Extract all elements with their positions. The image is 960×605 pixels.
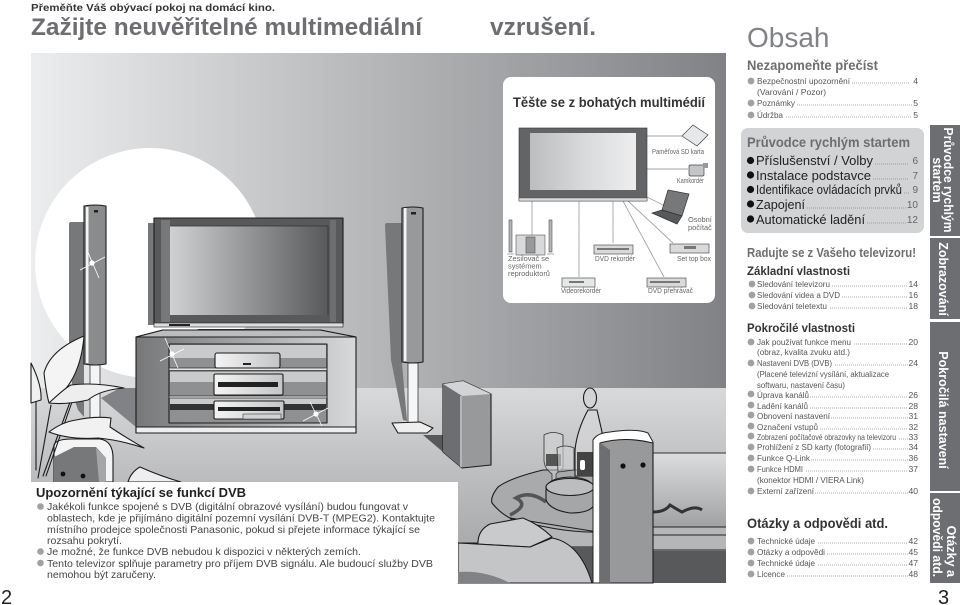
icon: speaker system: [507, 220, 554, 255]
section: advanced features: Nastavení DVB (DVB): [757, 358, 832, 368]
tab: quick start: [930, 125, 960, 236]
label: DVD player: DVD přehrávač: [648, 286, 693, 295]
section: advanced features: Obnovení nastavení: [757, 411, 831, 421]
section: must read: Nezapomeňte přečíst: [747, 58, 878, 73]
section: advanced features: Úprava kanálů: [757, 390, 809, 400]
TV stand with devices: [136, 330, 356, 433]
subwoofer: [443, 381, 491, 468]
panel: DVB notice: Jakékoli funkce spojené s DVB (digitální obrazové vysílání) budou fungovat v: [47, 502, 409, 513]
section: must read: [747, 58, 918, 120]
icon: set top box: [670, 244, 709, 253]
panel: quick start guide: 6: [912, 156, 918, 167]
section: advanced features: softwaru, nastavení času): [757, 380, 845, 390]
section: advanced features: 37: [908, 464, 918, 474]
section: advanced features: 20: [908, 337, 918, 347]
small TV: [519, 128, 647, 201]
section: advanced features: 34: [908, 442, 918, 452]
icon: laptop: [652, 190, 689, 224]
icon: camcorder: [689, 163, 708, 176]
panel: DVB notice: rozsahu pokrytí.: [47, 536, 122, 547]
section: basic features: Sledování televizoru: [757, 279, 830, 289]
left speaker: [69, 205, 106, 420]
title: [31, 14, 596, 41]
section: questions and answers: [747, 515, 918, 579]
section: advanced features: (Placené televizní vysílání, aktualizace: [757, 369, 889, 379]
subtitle: Přeměňte Váš obývací pokoj na domácí kino.: [31, 2, 275, 14]
illustration: living room with TV: [31, 53, 726, 583]
tab: advanced: Pokročilá nastavení: [936, 351, 950, 469]
section: advanced features: 26: [908, 390, 918, 400]
panel: quick start guide: 9: [912, 185, 918, 196]
panel: quick start guide: Automatické ladění: [756, 213, 866, 227]
section: must read: (Varování / Pozor): [757, 87, 826, 97]
section: questions and answers: Technické údaje: [757, 536, 815, 546]
label: VCR: Videorekordér: [561, 286, 601, 295]
section: advanced features: 32: [908, 422, 918, 432]
panel: quick start guide: 7: [912, 171, 918, 182]
section: must read: Bezpečnostní upozornění: [757, 76, 851, 86]
section: advanced features: (konektor HDMI / VIERA Link): [757, 475, 864, 485]
section: advanced features: Pokročilé vlastnosti: [747, 321, 855, 335]
label: speaker system: systémem: [508, 262, 542, 270]
section: advanced features: 31: [908, 411, 918, 421]
label: SD card: Paměťová SD karta: [652, 147, 705, 156]
section: questions and answers: 45: [908, 547, 918, 557]
section: must read: 5: [913, 98, 918, 108]
tab: questions: odpovědi atd.: [930, 498, 944, 577]
right speaker: [385, 207, 433, 433]
tab: viewing: Zobrazování: [936, 242, 950, 316]
label: set top box: Set top box: [677, 254, 711, 263]
section: advanced features: 28: [908, 401, 918, 411]
section: basic features: Základní vlastnosti: [747, 264, 850, 278]
title: Zažijte neuvěřitelné multimediální: [31, 14, 423, 41]
television: [148, 218, 343, 333]
section: advanced features: (obraz, kvalita zvuku atd.): [757, 347, 850, 357]
panel: quick start guide: Příslušenství / Volby: [756, 154, 874, 168]
section: advanced features: 36: [908, 453, 918, 463]
panel: quick start guide: 10: [907, 200, 918, 211]
section: advanced features: 33: [908, 432, 918, 442]
section: advanced features: 40: [908, 486, 918, 496]
panel: DVB notice: Tento televizor splňuje parametry pro příjem DVB signálu. Ale budoucí služby DVB: [47, 559, 433, 570]
panel: quick start guide: Průvodce rychlým startem: [747, 135, 910, 150]
label: speaker system: Zesilovač se: [508, 254, 549, 263]
section: questions and answers: Otázky a odpovědi atd.: [747, 515, 888, 531]
label: speaker system: reproduktorů: [508, 269, 550, 278]
panel: quick start guide: [741, 128, 924, 233]
section: advanced features: Funkce HDMI: [757, 464, 803, 474]
panel: DVB notice: Upozornění týkající se funkcí DVB: [36, 486, 246, 500]
section: advanced features: Zobrazení počítačové obrazovky na televizoru: [757, 432, 896, 442]
panel: quick start guide: 12: [907, 215, 918, 226]
panel: multimedia connections: [503, 77, 715, 303]
heading: Těšte se z bohatých multimédií: [513, 94, 706, 110]
section: questions and answers: Technické údaje: [757, 558, 815, 568]
section: questions and answers: Otázky a odpovědi: [757, 547, 825, 557]
section: basic features: 14: [908, 279, 918, 289]
tab: questions: [930, 493, 960, 583]
label: personal computer: počítač: [688, 223, 712, 232]
panel: DVB notice: Je možné, že funkce DVB nebudou k dispozici v některých zemích.: [47, 547, 361, 558]
panel: DVB notice: nemohou být zaručeny.: [47, 570, 156, 581]
tab: viewing: [930, 238, 960, 319]
section: basic features: 18: [908, 301, 918, 311]
section: advanced features: Externí zařízení: [757, 486, 815, 496]
icon: DVD player: [647, 278, 686, 287]
bottle and glasses: [544, 388, 602, 513]
section: advanced features: [747, 321, 918, 496]
panel: DVB notice: [31, 482, 458, 583]
section: advanced features: Jak používat funkce menu: [757, 337, 851, 347]
panel: quick start guide: Identifikace ovládacích prvků: [756, 183, 902, 197]
section: advanced features: Funkce Q-Link: [757, 453, 811, 463]
panel: quick start guide: Zapojení: [756, 198, 805, 212]
tab: quick start: startem: [930, 157, 944, 203]
section: basic features: Sledování teletextu: [757, 301, 827, 311]
section: basic features: [747, 264, 918, 311]
panel: DVB notice: místního prodejce společnosti Panasonic, pokud si přejete informace týkající se: [47, 525, 420, 536]
section: advanced features: Prohlížení z SD karty (fotografií): [757, 442, 871, 452]
icon: SD card: [682, 125, 708, 146]
section: basic features: 16: [908, 290, 918, 300]
label: personal computer: Osobní: [688, 215, 713, 224]
tab: quick start: Průvodce rychlým: [941, 128, 955, 232]
label: speaker system: [508, 254, 550, 278]
section: must read: Údržba: [757, 110, 783, 120]
label: personal computer: [688, 215, 713, 232]
tab: advanced: [930, 322, 960, 491]
section: must read: 5: [913, 110, 918, 120]
sofa back and table: [492, 453, 726, 583]
heading: enjoy your TV: Radujte se z Vašeho televizoru!: [747, 245, 916, 260]
label: camcorder: Kamkordér: [677, 176, 704, 185]
section: questions and answers: 47: [908, 558, 918, 568]
front right speaker: [593, 430, 653, 583]
icon: VCR: [562, 278, 595, 287]
plant and front left speaker: [31, 336, 181, 482]
tab: questions: Otázky a: [944, 526, 958, 578]
section: questions and answers: 48: [908, 569, 918, 579]
section: advanced features: Ladění kanálů: [757, 401, 808, 411]
icon: DVD recorder: [594, 245, 633, 254]
section: basic features: Sledování videa a DVD: [757, 290, 840, 300]
label: DVD recorder: DVD rekordér: [595, 254, 635, 263]
section: questions and answers: Licence: [757, 569, 785, 579]
section: must read: Poznámky: [757, 98, 796, 108]
sparkles: [80, 250, 328, 426]
cushions: [458, 518, 592, 583]
section: must read: 4: [913, 76, 918, 86]
section: questions and answers: 42: [908, 536, 918, 546]
section: advanced features: Označení vstupů: [757, 422, 818, 432]
heading: contents: Obsah: [747, 22, 830, 53]
panel: quick start guide: Instalace podstavce: [756, 169, 871, 183]
panel: DVB notice: oblastech, kde je přijímáno digitální pozemní vysílání DVB-T (MPEG2). Kontaktujte: [47, 514, 435, 524]
connection lines: [532, 136, 688, 277]
title: vzrušení.: [490, 14, 596, 41]
section: advanced features: 24: [908, 358, 918, 368]
